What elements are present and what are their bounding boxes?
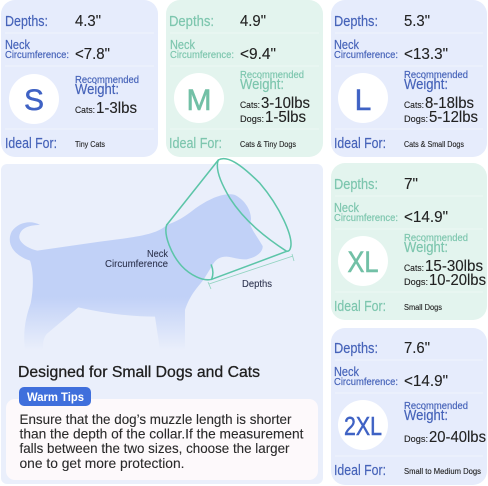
panel: size 2XL [331,328,487,485]
panel: size XL: XL [348,246,378,279]
panel: size M: Depths: [169,14,214,30]
panel: size 2XL: Ideal For: [334,463,386,479]
panel: size L [331,0,487,157]
panel: size L: Depths: [334,14,378,30]
panel: size S [1,0,158,157]
panel: size M: Cats: [240,100,260,111]
panel: size 2XL: Circumference: [334,377,398,388]
panel: size S: Tiny Cats [75,139,105,149]
panel: size L: Cats & Small Dogs [404,139,464,149]
card: warm tips text: one to get more protection. [20,455,184,471]
panel: size XL: 15-30lbs [425,258,483,275]
panel: size M: Neck [170,37,195,52]
panel: size L: Neck [334,37,359,52]
panel: size M: Recommended [240,70,304,81]
panel: size XL [331,163,487,320]
panel: size S: Weight: [75,82,119,98]
panel: size M: 1-5lbs [265,109,306,126]
panel: size M: Ideal For: [169,136,222,152]
badge: warm tips: Warm Tips [27,390,84,404]
panel: size 2XL: 2XL [344,411,382,441]
panel: size M: Circumference: [170,50,234,61]
panel: size XL: Small Dogs [404,302,442,312]
label: neck circumference [105,248,169,270]
panel: size S: Ideal For: [5,136,57,152]
panel: size S: 4.3" [75,13,101,30]
panel: size S: Circumference: [5,50,69,61]
panel: size S: 1-3lbs [96,100,137,117]
panel: size XL: Ideal For: [334,299,386,315]
panel: size L: Cats: [404,100,424,111]
panel: collar measurement illustration [1,159,323,484]
panel: size XL: Dogs: [404,277,428,288]
panel: size L: L [355,84,371,117]
panel: size XL: Neck [334,200,359,215]
card: warm tips text [6,399,318,480]
panel: size L: Recommended [404,70,468,81]
panel: size S: Neck [5,37,30,52]
card: warm tips text: than the depth of the collar.If the measurement [20,426,304,442]
heading: designed for small dogs and cats: Designed for Small Dogs and Cats [18,364,260,381]
panel: size 2XL: Depths: [334,341,378,357]
panel: size M [166,0,323,157]
panel: size L: <13.3" [404,46,448,63]
panel: size S: Depths: [5,14,48,30]
card: warm tips text: falls between the two sizes, choose the larger [20,440,290,456]
panel: size L: Circumference: [334,50,398,61]
panel: size 2XL: 7.6" [404,340,430,357]
dimension line: depths [208,254,294,289]
panel: size M: M [186,84,212,117]
panel: size L: 8-18lbs [425,95,474,112]
panel: size M: <9.4" [240,46,276,63]
panel: size XL: Recommended [404,233,468,244]
panel: size 2XL: Dogs: [404,434,428,445]
illustration: cone collar outline [166,159,291,280]
panel: size XL: Weight: [404,240,448,256]
panel: size XL: Cats: [404,263,424,274]
panel: size XL: <14.9" [404,209,448,226]
panel: size 2XL: Neck [334,364,359,379]
badge: warm tips [19,387,91,406]
panel: size L: 5-12lbs [429,109,478,126]
panel: size M: Weight: [240,77,284,93]
panel: size 2XL: Weight: [404,408,448,424]
panel: size L: Ideal For: [334,136,386,152]
panel: size L: 5.3" [404,13,430,30]
panel: size 2XL: Small to Medium Dogs [404,466,481,476]
panel: size L: Dogs: [404,114,428,125]
panel: size S: <7.8" [75,46,110,63]
panel: size XL: 7" [404,176,418,193]
panel: size M: 3-10lbs [261,95,310,112]
panel: size S: Recommended [75,75,139,86]
card: warm tips text: Ensure that the dog’s muzzle length is shorter [20,411,292,427]
panel: size S: Cats: [75,105,95,116]
label: neck circumference: Circumference [105,258,168,270]
panel: size M: Cats & Tiny Dogs [240,139,296,149]
panel: size XL: Circumference: [334,213,398,224]
illustration: dog silhouette [10,194,263,350]
panel: size M: 4.9" [240,13,266,30]
panel: size 2XL: Recommended [404,401,468,412]
panel: size L: Weight: [404,77,448,93]
panel: size M: Dogs: [240,114,264,125]
panel: size S: S [24,84,44,117]
label: depths: Depths [242,278,272,290]
panel: size 2XL: <14.9" [404,373,448,390]
label: neck circumference: Neck [147,248,169,260]
panel: size XL: Depths: [334,177,378,193]
